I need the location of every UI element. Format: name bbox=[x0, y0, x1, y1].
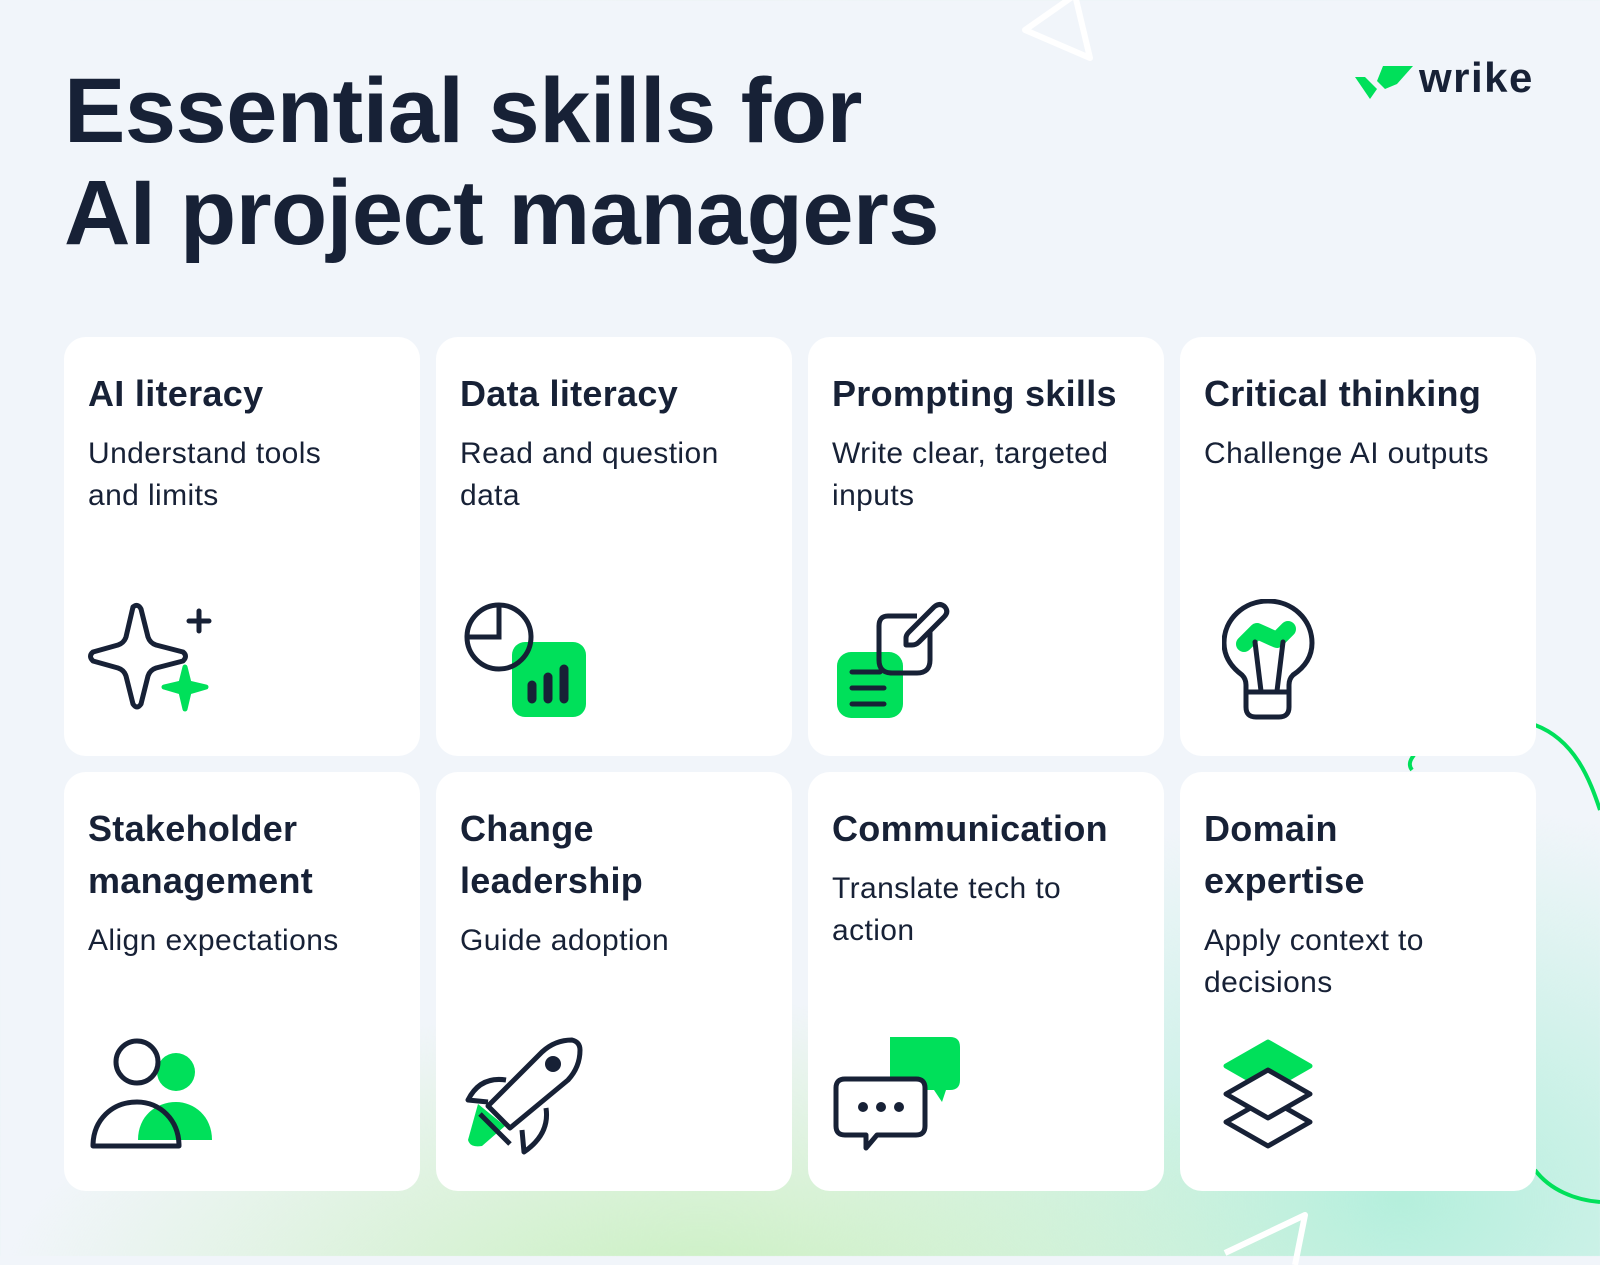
heading: AI literacy bbox=[88, 373, 263, 414]
heading bbox=[460, 808, 669, 957]
card: Domain expertise bbox=[1180, 772, 1536, 1191]
logo: wrike: wrike bbox=[1419, 54, 1534, 101]
heading: Domain bbox=[1204, 808, 1338, 849]
heading: and limits bbox=[88, 479, 219, 512]
card: Stakeholder management bbox=[64, 772, 420, 1191]
heading: action bbox=[832, 914, 914, 947]
card: AI literacy bbox=[64, 337, 420, 756]
heading: Apply context to bbox=[1204, 924, 1424, 957]
heading: Write clear, targeted bbox=[832, 437, 1108, 470]
heading: leadership bbox=[460, 860, 643, 901]
heading bbox=[832, 373, 1117, 512]
heading: Prompting skills bbox=[832, 373, 1117, 414]
icon: sparkles bbox=[88, 602, 212, 712]
heading: inputs bbox=[832, 479, 914, 512]
icon: chat bubbles bbox=[834, 1037, 960, 1150]
decorative: green curves right bbox=[1408, 723, 1600, 1204]
heading: decisions bbox=[1204, 966, 1333, 999]
heading: Understand tools bbox=[88, 437, 321, 470]
icon: note and edit bbox=[837, 602, 950, 718]
icon: rocket bbox=[466, 1038, 582, 1154]
heading bbox=[832, 808, 1108, 947]
card: Change leadership bbox=[436, 772, 792, 1191]
heading: Communication bbox=[832, 808, 1108, 849]
heading: Align expectations bbox=[88, 924, 339, 957]
heading bbox=[1204, 373, 1489, 470]
heading bbox=[1204, 808, 1424, 999]
heading: Stakeholder bbox=[88, 808, 297, 849]
card: Critical thinking bbox=[1180, 337, 1536, 756]
heading: Change bbox=[460, 808, 594, 849]
heading bbox=[460, 373, 719, 512]
heading: Guide adoption bbox=[460, 924, 669, 957]
icon: layers bbox=[1224, 1040, 1312, 1148]
heading: Critical thinking bbox=[1204, 373, 1481, 414]
heading: Read and question bbox=[460, 437, 719, 470]
card: Data literacy bbox=[436, 337, 792, 756]
heading: management bbox=[88, 860, 313, 901]
heading: data bbox=[460, 479, 520, 512]
title: AI project managers bbox=[64, 162, 939, 264]
heading: Translate tech to bbox=[832, 872, 1061, 905]
title bbox=[64, 60, 939, 264]
icon: people bbox=[90, 1038, 212, 1148]
heading: Data literacy bbox=[460, 373, 678, 414]
heading: expertise bbox=[1204, 860, 1365, 901]
heading: Challenge AI outputs bbox=[1204, 437, 1489, 470]
decorative: triangle top bbox=[1022, 0, 1093, 61]
icon: lightbulb bbox=[1222, 599, 1314, 720]
card: Prompting skills bbox=[808, 337, 1164, 756]
decorative: triangle bottom bbox=[1224, 1212, 1308, 1265]
heading bbox=[88, 373, 321, 512]
icon: pie and bar chart bbox=[464, 602, 586, 717]
title: Essential skills for bbox=[64, 60, 862, 162]
logo: wrike bbox=[1355, 54, 1534, 101]
heading bbox=[88, 808, 339, 957]
card: Communication bbox=[808, 772, 1164, 1191]
